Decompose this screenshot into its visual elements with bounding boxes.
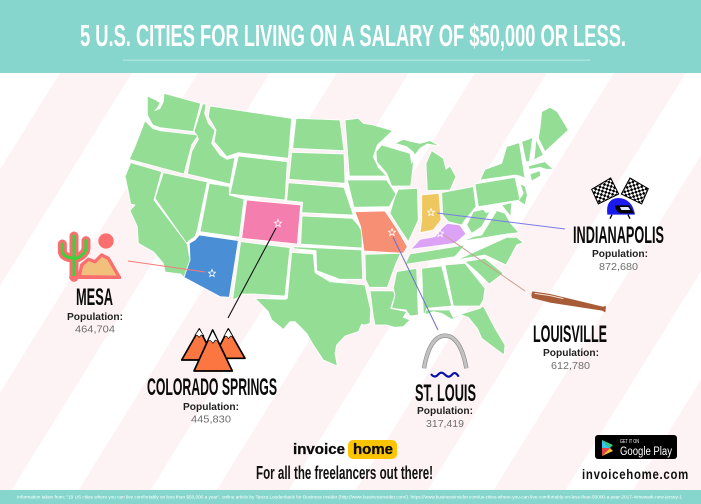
icon: baseball bat — [531, 291, 606, 312]
eastern states — [390, 139, 519, 242]
label: St. Louis: Population: — [417, 405, 473, 417]
tagline: For all the freelancers out there! — [256, 462, 433, 483]
label: Colorado Springs: 445,830 — [191, 414, 231, 426]
label: Indianapolis: 872,680 — [599, 261, 638, 273]
label: Mesa: Population: — [67, 311, 123, 323]
connector line: Colorado Springs — [228, 228, 276, 318]
label: St. Louis: 317,419 — [426, 418, 464, 430]
state: Kentucky — [411, 223, 466, 249]
central states — [287, 118, 414, 248]
state: Indiana — [420, 193, 441, 233]
state: Arizona — [184, 235, 238, 297]
label: Indianapolis — [573, 222, 664, 273]
label: St. Louis: ST. LOUIS — [415, 380, 476, 407]
badge: Google Play: Google Play — [620, 446, 672, 458]
label: Colorado Springs: COLORADO SPRINGS — [147, 374, 277, 401]
northeastern states — [475, 107, 568, 207]
label: Mesa: MESA — [76, 284, 113, 311]
logo: invoice home: home — [353, 441, 393, 458]
label: Louisville: 612,780 — [551, 360, 590, 372]
header banner — [0, 0, 701, 73]
label: St. Louis — [415, 380, 476, 430]
state: Colorado — [242, 200, 301, 244]
connector line: Louisville — [444, 235, 525, 291]
state: Missouri — [355, 211, 407, 253]
icon: Gateway Arch and river — [424, 336, 466, 377]
label: Colorado Springs: Population: — [183, 401, 239, 413]
label: Louisville: LOUISVILLE — [533, 321, 607, 348]
map of the United States — [125, 93, 568, 366]
icon: cactus and desert — [62, 233, 121, 279]
icon: checkered flags and helmet — [592, 178, 648, 219]
label: Louisville — [533, 321, 607, 372]
badge: Google Play: GET IT ON — [620, 439, 639, 445]
western states — [125, 93, 292, 299]
label: Indianapolis: Population: — [592, 248, 648, 260]
connector line: Indianapolis — [437, 213, 565, 229]
badge: Google Play — [595, 435, 677, 459]
southeastern states — [405, 237, 523, 355]
logo: invoice home: invoice — [293, 441, 345, 458]
connector line: St. Louis — [393, 237, 438, 330]
label: Colorado Springs — [147, 374, 277, 426]
label: Louisville: Population: — [543, 347, 599, 359]
logo: invoice home — [293, 440, 397, 459]
southern plains states — [255, 247, 418, 366]
connector line: Mesa — [128, 261, 205, 272]
icon: mountains — [182, 329, 245, 371]
footer source band — [0, 490, 701, 504]
label: Mesa — [67, 284, 123, 336]
city star markers — [208, 208, 444, 276]
label: Mesa: 464,704 — [75, 324, 115, 336]
source citation: Information taken from: "19 US cities where you can live comfortably on less than $50,000 a year", online article by Tanza Loudenback for Business Insider (http://www.businessinsider.com/). https://www.businessinsider.com/us-cities-where-you-can-live-comfortably-on-less-than-50000-a-year-2017-4#newark-new-jersey-1 — [17, 494, 683, 500]
